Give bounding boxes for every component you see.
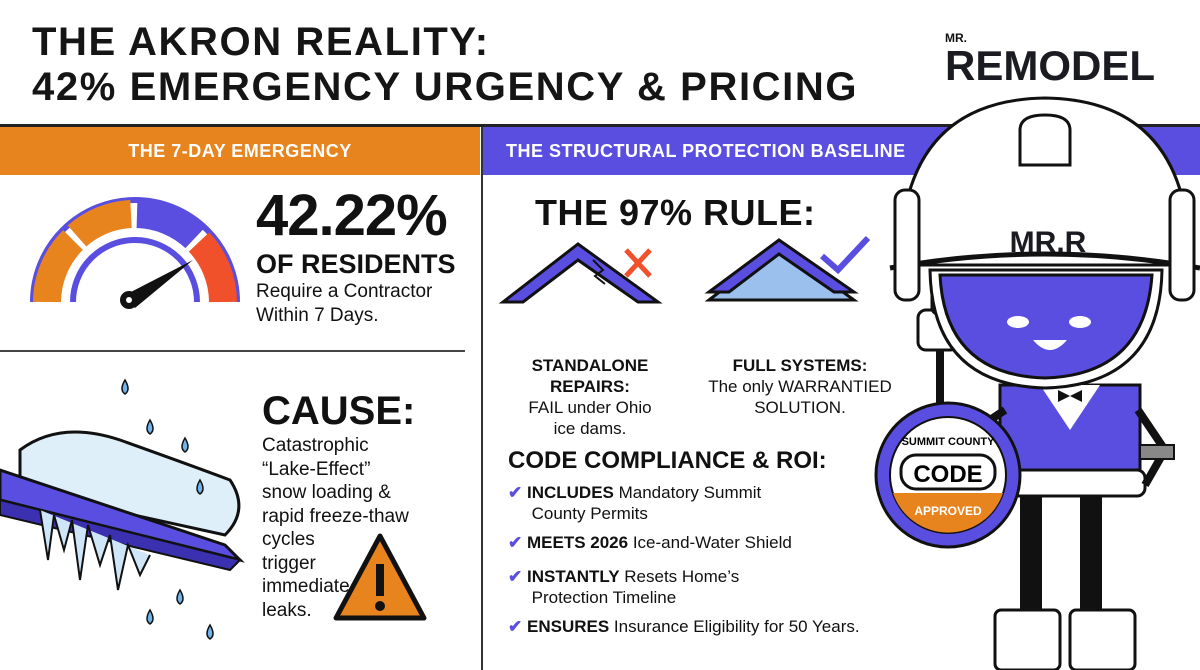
top divider line	[0, 124, 1200, 127]
text: full systems: SOLUTION.	[754, 398, 846, 417]
badge: APPROVED	[914, 504, 982, 518]
title: THE AKRON REALITY:	[32, 20, 490, 64]
badge: SUMMIT COUNTY	[902, 436, 995, 448]
head / helmet	[900, 98, 1190, 265]
logo: REMODEL	[945, 42, 1155, 89]
text: standalone repairs: REPAIRS:	[550, 377, 630, 396]
checklist	[508, 483, 860, 636]
title: 42% EMERGENCY URGENCY & PRICING	[32, 65, 858, 109]
stat: 42.22%: OF RESIDENTS	[256, 249, 456, 279]
checklist: ✔ MEETS 2026 Ice-and-Water Shield	[508, 533, 792, 552]
legs	[1020, 490, 1042, 620]
icon: icy gutter	[0, 378, 245, 640]
header: 7-day emergency: THE 7-DAY EMERGENCY	[128, 141, 352, 161]
header: structural protection	[482, 127, 1200, 175]
vest	[1000, 385, 1140, 480]
heading: 97% rule: THE 97% RULE:	[535, 192, 816, 233]
robot mascot: MR.R	[1010, 226, 1087, 259]
text: full systems: FULL SYSTEMS:	[733, 356, 867, 375]
stat: 42.22%: Within 7 Days.	[256, 305, 378, 326]
heading: code compliance: CODE COMPLIANCE & ROI:	[508, 447, 827, 474]
icon: warning	[334, 534, 426, 620]
badge: CODE	[913, 461, 983, 488]
text: cause: “Lake-Effect”	[262, 458, 370, 480]
text: standalone repairs	[528, 356, 652, 438]
checklist: County Permits	[532, 504, 648, 523]
gauge icon	[30, 197, 240, 309]
text: standalone repairs: FAIL under Ohio	[528, 398, 652, 417]
text: cause: CAUSE:	[262, 389, 415, 433]
text: cause: rapid freeze-thaw	[262, 506, 409, 526]
text: full systems	[708, 356, 892, 417]
horizontal divider left	[0, 350, 465, 352]
text: cause	[262, 389, 415, 620]
stat: 42.22%: 42.22%	[256, 183, 447, 248]
arms	[940, 330, 1005, 440]
text: cause: leaks.	[262, 600, 312, 620]
checklist: ✔ INCLUDES Mandatory Summit	[508, 483, 761, 502]
text: cause: trigger	[262, 552, 316, 574]
stat: 42.22%	[256, 183, 456, 326]
header: structural protection: THE STRUCTURAL PROTECTION BASELINE	[506, 141, 906, 161]
icon: full system roof	[704, 236, 870, 302]
checklist: ✔ ENSURES Insurance Eligibility for 50 Years.	[508, 617, 860, 636]
stat: 42.22%: Require a Contractor	[256, 281, 432, 302]
checklist: Protection Timeline	[532, 588, 676, 607]
text: cause: immediate	[262, 576, 350, 597]
text: standalone repairs: STANDALONE	[532, 356, 648, 375]
robot mascot	[874, 96, 1200, 670]
checklist: ✔ INSTANTLY Resets Home’s	[508, 567, 739, 586]
title	[32, 20, 858, 109]
logo: MR.	[945, 31, 967, 45]
text: standalone repairs: ice dams.	[554, 419, 626, 438]
text: cause: snow loading &	[262, 482, 391, 503]
vertical divider	[481, 127, 483, 670]
text: cause: cycles	[262, 529, 315, 550]
icon: broken roof	[498, 242, 662, 304]
text: cause: Catastrophic	[262, 435, 369, 456]
header: 7-day emergency	[0, 127, 480, 175]
text: full systems: The only WARRANTIED	[708, 377, 892, 396]
badge	[876, 403, 1020, 547]
